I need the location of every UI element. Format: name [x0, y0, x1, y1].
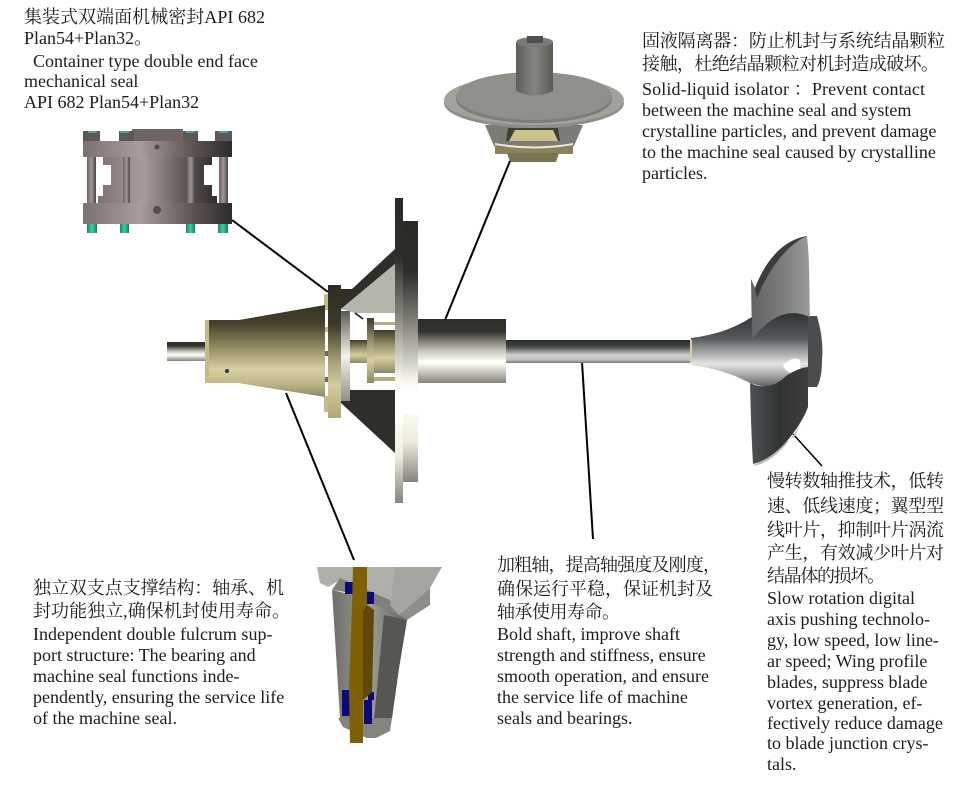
callout text: impeller: vortex generation, ef- [767, 693, 922, 713]
callout text: independent fulcrum structure [33, 578, 290, 728]
callout text: bold shaft: 加粗轴，提高轴强度及刚度， [497, 555, 721, 575]
lower blade [750, 367, 808, 466]
callout text: impeller: 结晶体的损坏。 [767, 566, 885, 586]
callout text: independent fulcrum structure: machine seal functions inde- [33, 666, 239, 686]
callout text: impeller: blades, suppress blade [767, 672, 927, 692]
callout text: mechanical seal: mechanical seal [24, 71, 138, 91]
callout text: solid-liquid isolator: 接触，杜绝结晶颗粒对机封造成破坏。 [642, 54, 939, 74]
large shaft [417, 319, 506, 383]
callout text: solid-liquid isolator: to the machine seal caused by crystalline [642, 142, 936, 162]
brown shaft [349, 567, 374, 743]
callout text: impeller: to blade junction crys- [767, 733, 928, 753]
callout text: solid-liquid isolator: Solid-liquid isolator ：Prevent contact [642, 79, 925, 99]
upper mounting plate [395, 198, 418, 392]
callout text: mechanical seal: 集装式双端面机械密封API 682 [24, 7, 265, 27]
callout text: impeller: 速、低线速度；翼型型 [767, 496, 944, 516]
callout text: impeller: 产生，有效减少叶片对 [767, 543, 944, 563]
coupling [350, 313, 395, 383]
callout text: impeller: axis pushing technolo- [767, 609, 930, 629]
callout text: solid-liquid isolator: between the machine seal and system [642, 100, 911, 120]
callout text: independent fulcrum structure: pendently, ensuring the service life [33, 687, 284, 707]
callout text: bold shaft [497, 555, 721, 728]
cone housing [332, 590, 407, 718]
diagram: mechanical seal detail [83, 129, 232, 233]
callout text: independent fulcrum structure: 独立双支点支撑结构：轴承、机 [33, 578, 284, 598]
diagram: bearing cutaway detail [317, 567, 442, 743]
diagram: solid-liquid isolator detail [444, 36, 624, 162]
callout text: solid-liquid isolator: 固液隔离器：防止机封与系统结晶颗粒 [642, 31, 945, 51]
callout text: impeller: ar speed; Wing profile [767, 651, 927, 671]
support cone lower [341, 390, 395, 453]
callout text: bold shaft: strength and stiffness, ensure [497, 645, 706, 665]
support cone upper [341, 249, 395, 313]
callout text: bold shaft: the service life of machine [497, 687, 688, 707]
callout text: solid-liquid isolator: crystalline particles, and prevent damage [642, 121, 936, 141]
callout text: impeller: gy, low speed, low line- [767, 630, 939, 650]
callout text: independent fulcrum structure: Independent double fulcrum sup- [33, 624, 272, 644]
callout text: mechanical seal: Container type double end face [33, 51, 258, 71]
callout text: bold shaft: Bold shaft, improve shaft [497, 624, 680, 644]
callout text: independent fulcrum structure: port structure: The bearing and [33, 645, 256, 665]
callout text: impeller: fectively reduce damage [767, 713, 943, 733]
upper blade [751, 236, 810, 340]
callout text: independent fulcrum structure: of the machine seal. [33, 708, 177, 728]
callout text: bold shaft: smooth operation, and ensure [497, 666, 709, 686]
bearing housing [167, 305, 325, 397]
impeller [690, 236, 822, 466]
lower mounting plate [395, 414, 418, 503]
top plate [317, 567, 442, 620]
callout text: solid-liquid isolator [642, 31, 945, 183]
leader lines [232, 161, 822, 560]
bearing flange [324, 285, 350, 418]
hub highlight [783, 359, 801, 373]
callout text: impeller: tals. [767, 754, 796, 774]
blue bearings [342, 582, 374, 724]
callout text: bold shaft: 轴承使用寿命。 [497, 602, 620, 622]
callout text: impeller: Slow rotation digital [767, 588, 915, 608]
callout text: solid-liquid isolator: particles. [642, 163, 707, 183]
callout text: mechanical seal [24, 7, 265, 112]
callout text: mechanical seal: Plan54+Plan32。 [24, 28, 152, 48]
callout text: impeller: 线叶片，抑制叶片涡流 [767, 520, 944, 540]
callout text: bold shaft: 确保运行平稳，保证机封及 [497, 579, 713, 599]
hub cap [808, 316, 822, 387]
callout text: impeller [767, 471, 944, 774]
callout text: mechanical seal: API 682 Plan54+Plan32 [24, 92, 199, 112]
hub [691, 311, 808, 389]
callout text: independent fulcrum structure: 封功能独立,确保机封使用寿命。 [33, 601, 290, 621]
callout text: impeller: 慢转数轴推技术，低转 [767, 471, 944, 491]
callout text: bold shaft: seals and bearings. [497, 708, 632, 728]
diagram: main agitator assembly [167, 198, 822, 503]
thin shaft [506, 340, 691, 363]
